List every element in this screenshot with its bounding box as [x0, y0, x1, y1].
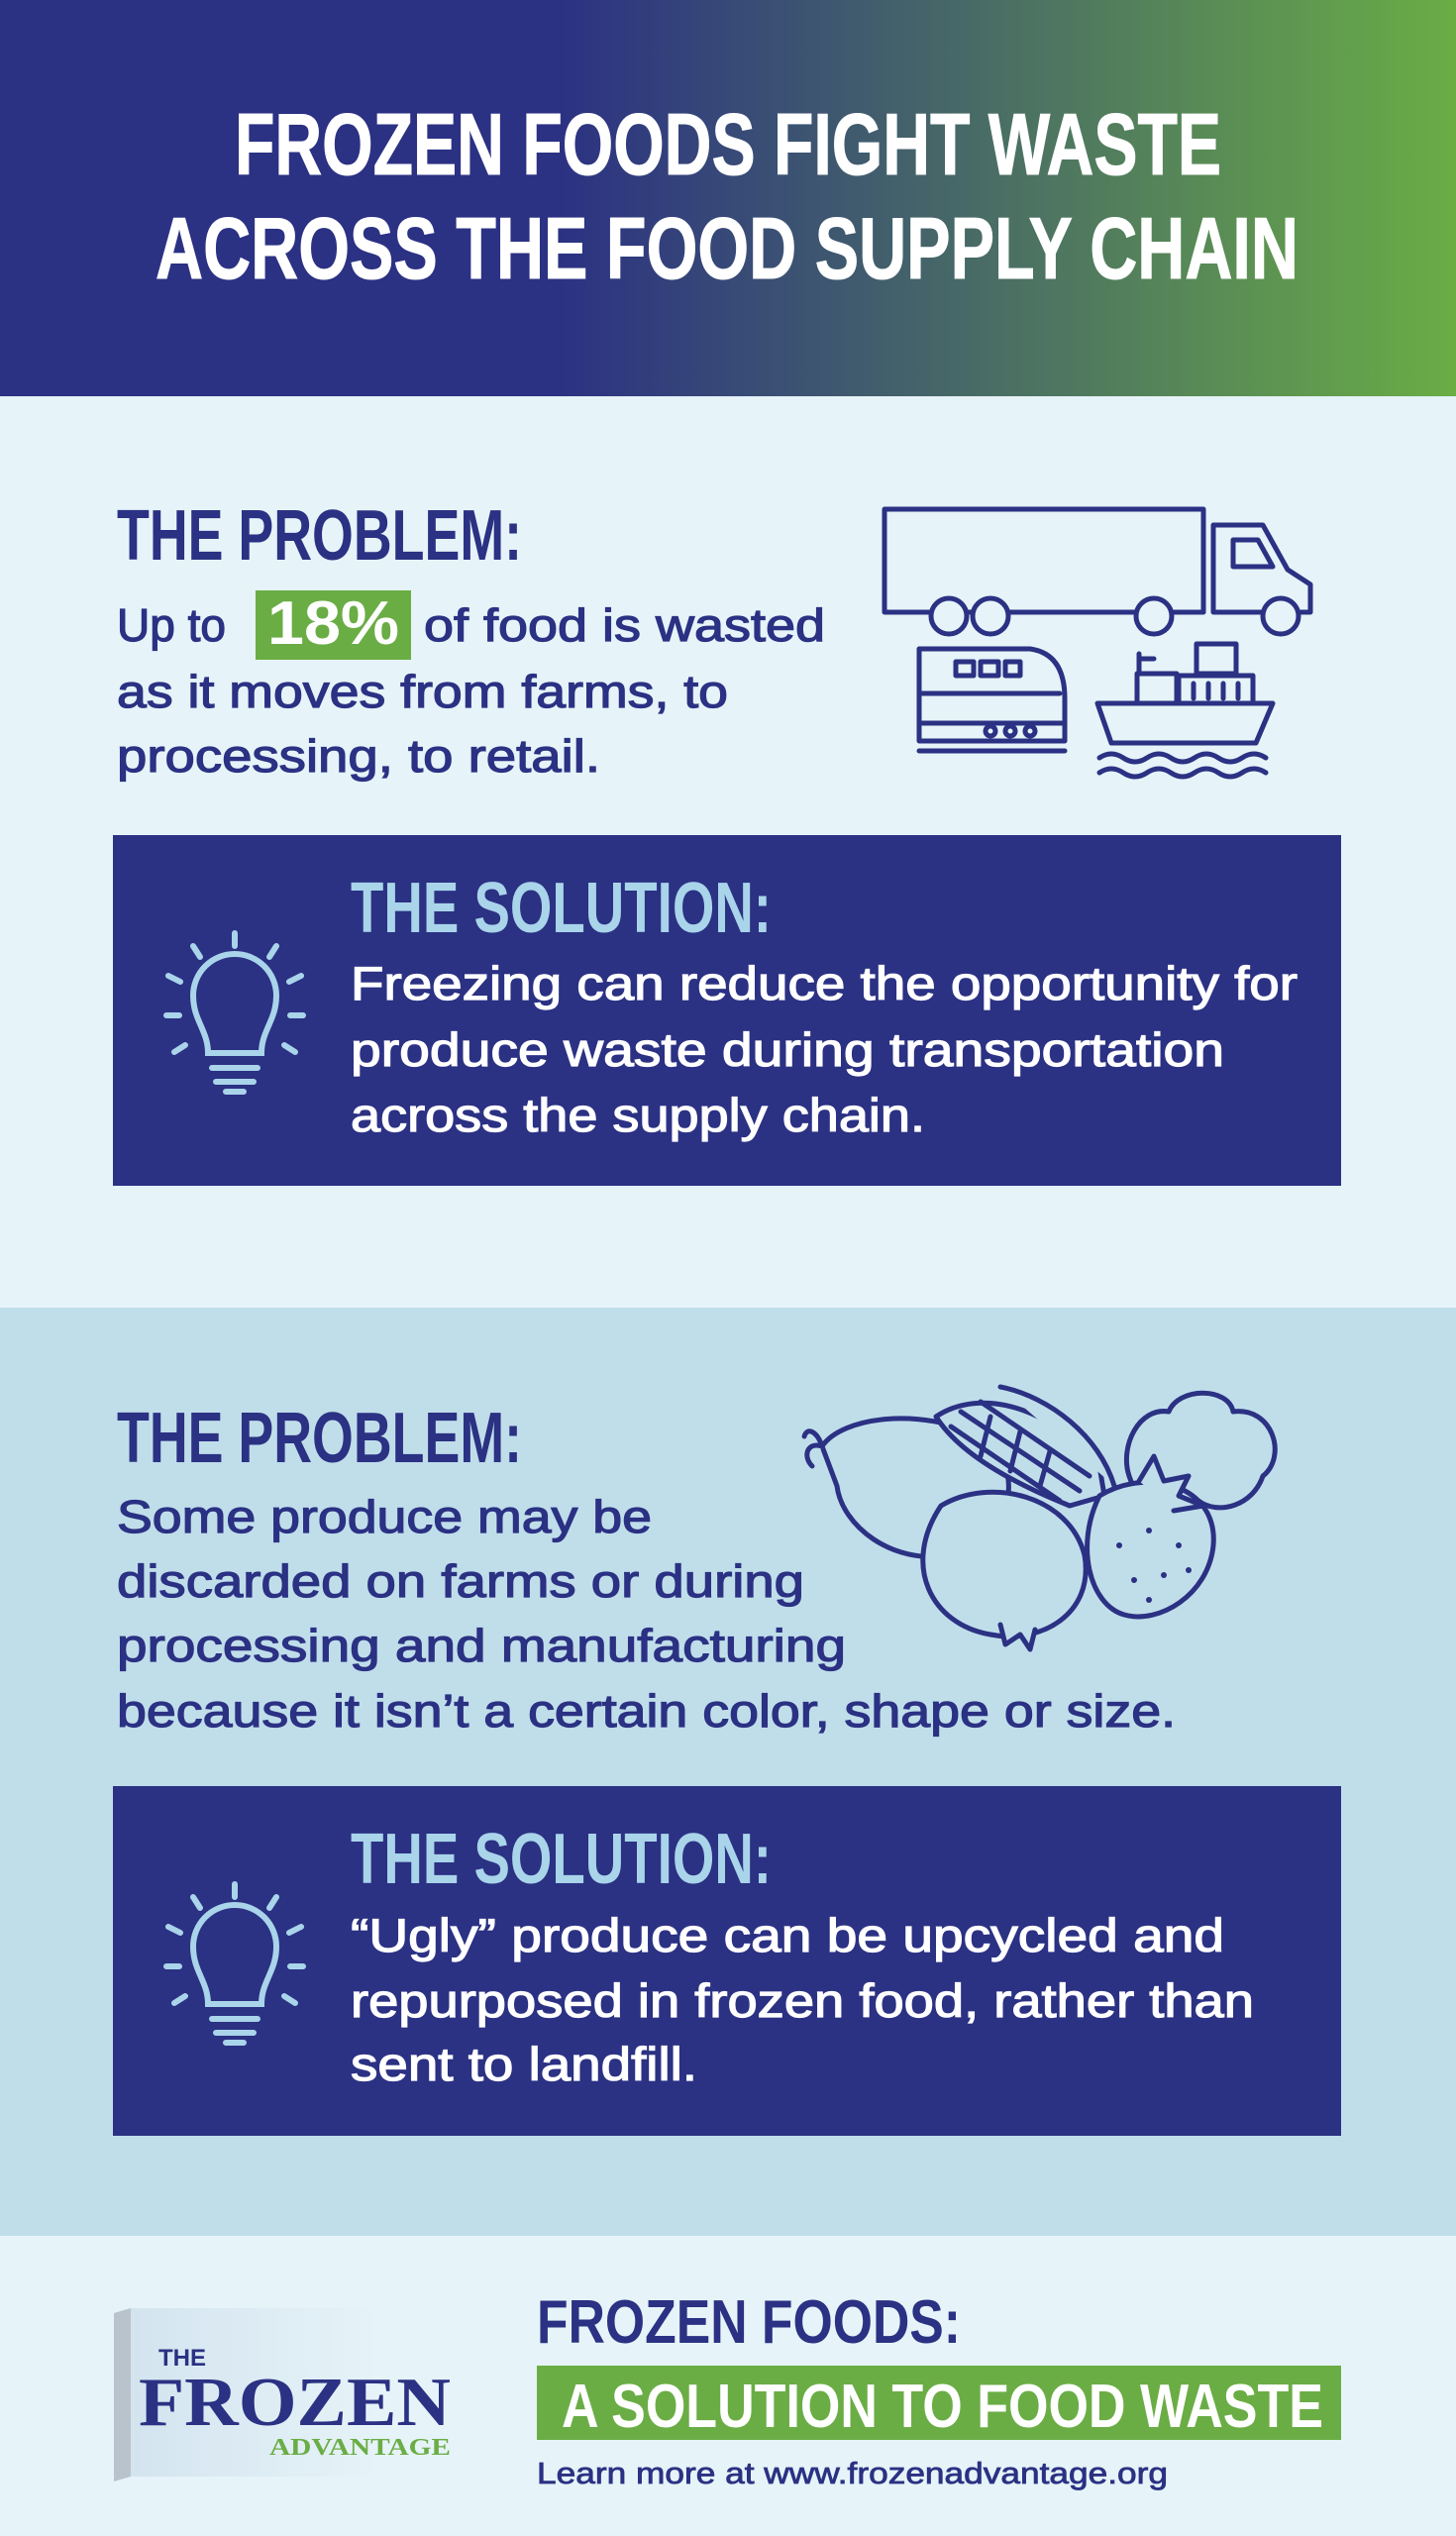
heading: the problem: THE PROBLEM: [117, 496, 522, 576]
footer tagline [537, 2288, 1341, 2490]
panel: solution 1 [113, 835, 1341, 1186]
text block: problem 2: Some produce may be [117, 1491, 652, 1542]
footer tagline: FROZEN FOODS: [537, 2288, 961, 2357]
text block: solution 1: Freezing can reduce the opportunity for [351, 957, 1298, 1009]
section 2 background [0, 1308, 1456, 2236]
text block: problem 1: as it moves from farms, to [117, 666, 728, 717]
text block: solution 2: repurposed in frozen food, rather than [351, 1974, 1254, 2027]
icon: lightbulb [166, 933, 303, 1092]
text block: problem 1 [117, 589, 825, 782]
section 1 background [0, 396, 1456, 1308]
text block: solution 1: produce waste during transportation [351, 1023, 1224, 1076]
text block: solution 1 [351, 957, 1298, 1141]
panel: problem 2 [117, 1399, 1176, 1737]
panel: solution 2 [113, 1786, 1341, 2136]
text block: problem 1: processing, to retail. [117, 730, 600, 782]
icon: lightbulb 2 [166, 1884, 303, 2043]
heading: the solution: THE SOLUTION: [351, 869, 772, 948]
logo: the frozen advantage [114, 2308, 451, 2482]
icon: produce [804, 1387, 1275, 1649]
text block: problem 2: because it isn’t a certain color, shape or size. [117, 1685, 1176, 1737]
icon: truck, train, ship [884, 509, 1310, 777]
title [156, 95, 1299, 297]
header band [0, 0, 1456, 396]
text block: problem 1: Up to [117, 599, 226, 651]
text block: problem 2 [117, 1491, 1176, 1737]
text block: solution 2 [351, 1909, 1254, 2090]
logo: the frozen advantage: FROZEN [139, 2365, 451, 2441]
heading: the problem 2: THE PROBLEM: [117, 1399, 522, 1478]
logo: the frozen advantage: THE [158, 2345, 206, 2372]
text block: solution 2: “Ugly” produce can be upcycled and [351, 1909, 1224, 1961]
text block: solution 2: sent to landfill. [351, 2038, 697, 2090]
footer tagline: A SOLUTION TO FOOD WASTE [562, 2373, 1323, 2441]
text block: problem 2: processing and manufacturing [117, 1620, 846, 1671]
text block: problem 2: discarded on farms or during [117, 1555, 804, 1607]
logo: the frozen advantage: ADVANTAGE [269, 2435, 451, 2461]
text block: problem 1: 18% [267, 589, 399, 658]
footer background [0, 2236, 1456, 2536]
text block: solution 1: across the supply chain. [351, 1089, 925, 1141]
text block: problem 1: of food is wasted [424, 599, 825, 651]
panel: problem 1 [117, 496, 825, 782]
heading: the solution 2: THE SOLUTION: [351, 1820, 772, 1899]
footer url: Learn more at www.frozenadvantage.org [537, 2456, 1168, 2490]
